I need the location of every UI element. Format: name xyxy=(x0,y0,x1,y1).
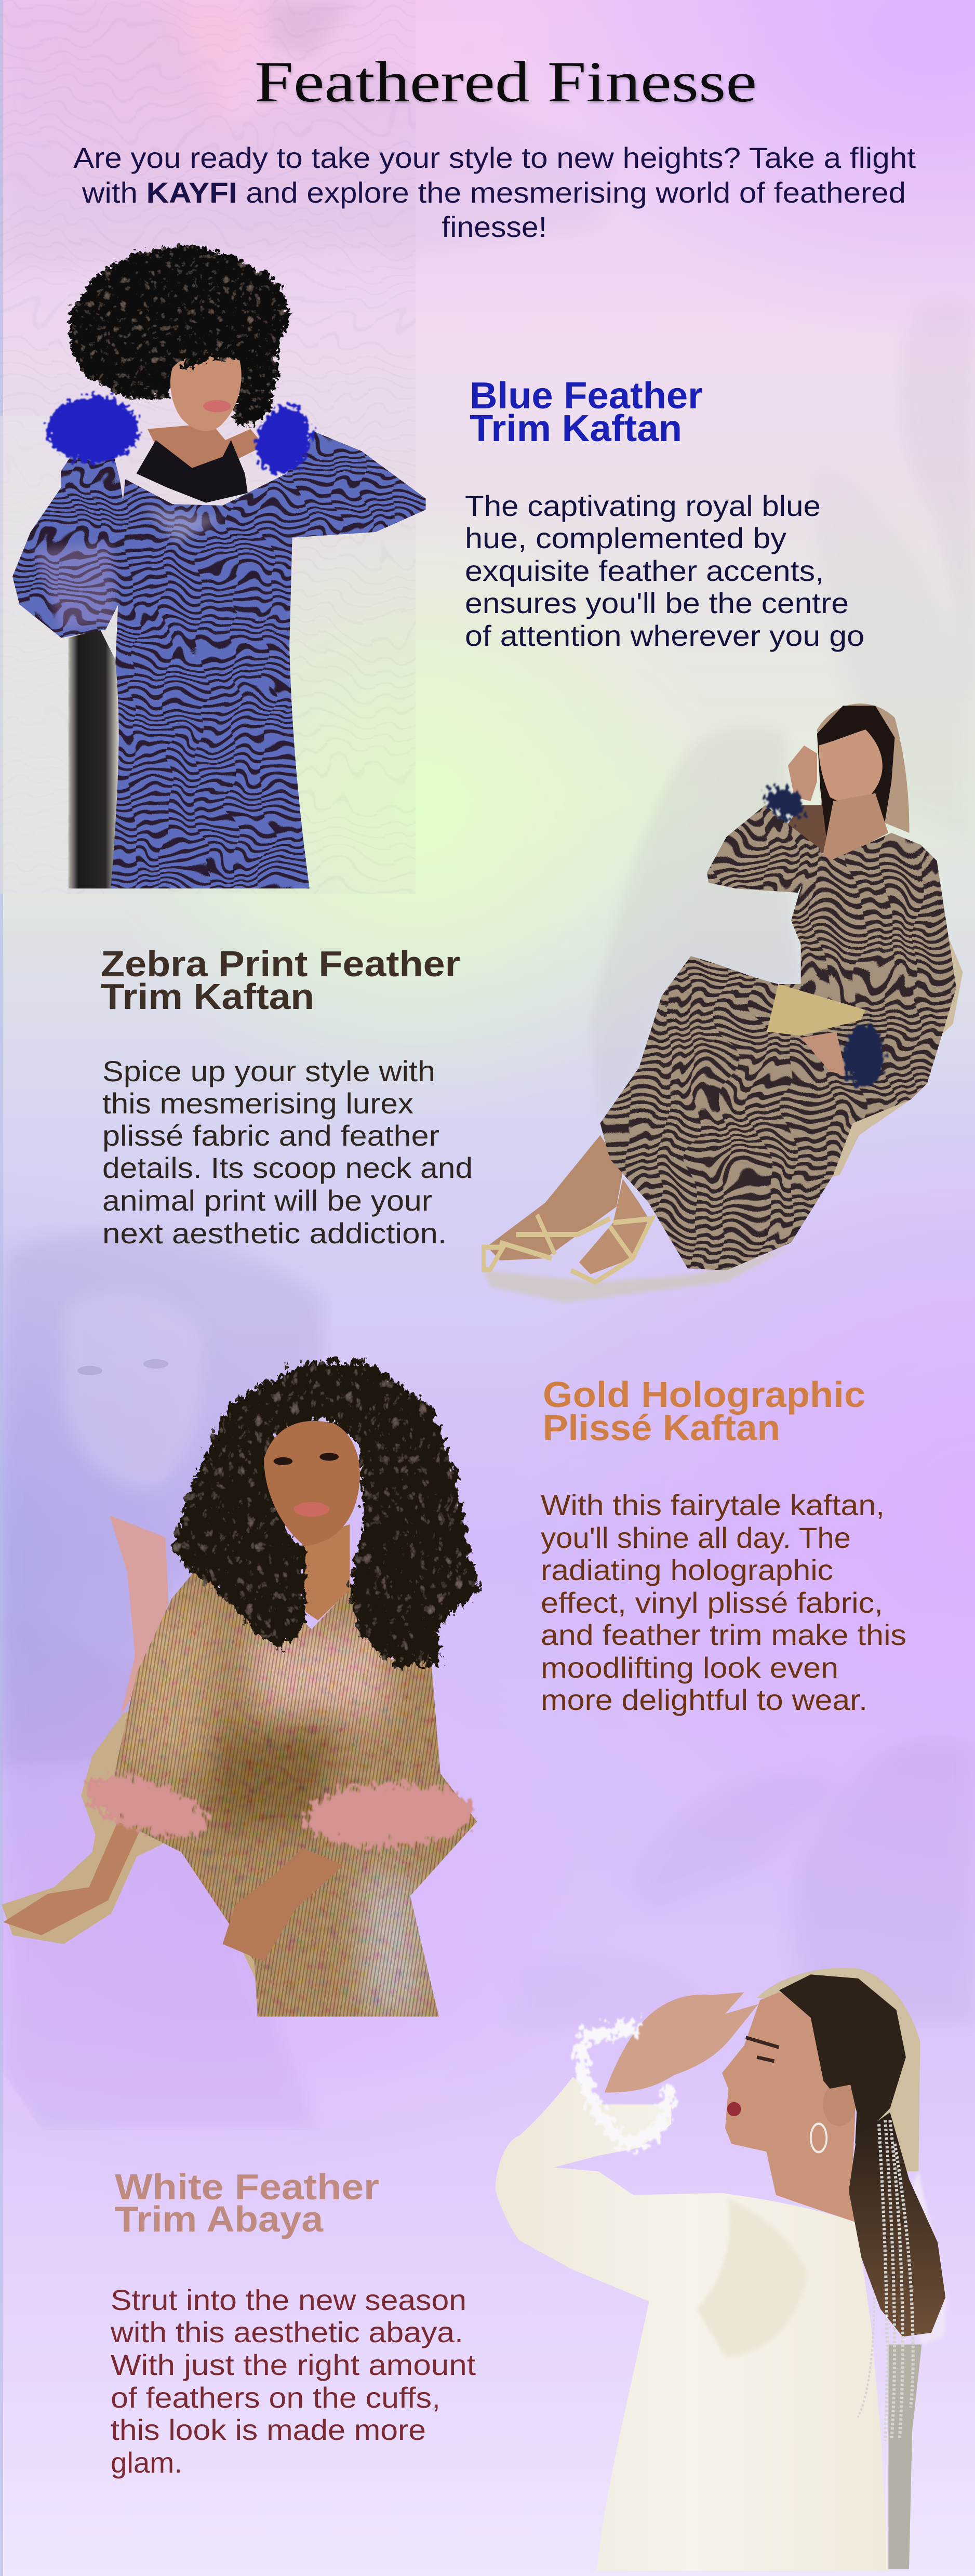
crystal chains xyxy=(858,2120,913,2441)
face xyxy=(819,729,883,804)
hair fringe curls xyxy=(178,339,245,368)
curly hair back xyxy=(67,241,288,423)
heading: gold holographic plisse kaftan: Plissé Kaftan xyxy=(543,1407,780,1448)
text block: white abaya: this look is made more xyxy=(111,2413,426,2446)
model 4: white feather trim abaya xyxy=(496,1968,947,2571)
white feather cuff xyxy=(581,2028,669,2144)
hoop earring xyxy=(811,2123,826,2152)
eye and brow xyxy=(746,2038,779,2061)
backdrop halo xyxy=(757,1968,920,2171)
lower hand xyxy=(801,1032,846,1075)
text block: blue kaftan: hue, complemented by xyxy=(465,522,786,554)
neck and hand skin xyxy=(148,423,264,476)
ponytail xyxy=(849,2113,945,2336)
tulle panel xyxy=(69,629,118,888)
right forearm and hand xyxy=(223,1848,343,1961)
heading: blue feather trim kaftan xyxy=(470,375,703,449)
left forearm xyxy=(3,1822,140,1935)
face xyxy=(264,1421,360,1546)
intro text: with KAYFI and explore the mesmerising world of feathered xyxy=(82,176,906,209)
face xyxy=(170,355,242,431)
text block: zebra kaftan: next aesthetic addiction. xyxy=(102,1217,447,1250)
text block: zebra kaftan: this mesmerising lurex xyxy=(102,1087,413,1120)
legs xyxy=(487,1135,623,1260)
heading: gold holographic plisse kaftan: Gold Holographic xyxy=(543,1374,865,1415)
heading: zebra print feather trim kaftan: Trim Kaftan xyxy=(101,976,314,1017)
text block: gold kaftan: moodlifting look even xyxy=(541,1651,838,1684)
heading: white feather trim abaya: Trim Abaya xyxy=(115,2199,324,2239)
heading: white feather trim abaya xyxy=(115,2167,379,2239)
blue feather cuff left xyxy=(47,395,139,462)
face and neck xyxy=(722,1992,857,2223)
patterned cushion xyxy=(110,1516,168,1715)
text block: gold kaftan: and feather trim make this xyxy=(541,1618,906,1651)
ghost image: faded profile lower right xyxy=(510,1739,975,2026)
text block: blue kaftan: of attention wherever you go xyxy=(465,619,864,652)
text block: white abaya: With just the right amount xyxy=(111,2348,476,2381)
ear xyxy=(823,2083,856,2126)
hand and wrist xyxy=(605,1992,758,2093)
blue feather cuff right xyxy=(249,400,318,481)
stone strip xyxy=(888,2345,921,2569)
ghost image: faded curly haired model left xyxy=(0,1233,322,2130)
lips xyxy=(203,400,231,413)
heading: zebra print feather trim kaftan: Zebra Print Feather xyxy=(101,944,460,984)
navy feather cuff lower xyxy=(844,1025,884,1086)
sofa arm xyxy=(2,1712,258,1983)
text block: white abaya: with this aesthetic abaya. xyxy=(110,2316,463,2348)
eyes and lips xyxy=(273,1453,339,1517)
model 2: zebra print feather trim kaftan xyxy=(484,703,975,1322)
text block: gold kaftan: you'll shine all day. The xyxy=(541,1521,851,1554)
title: Feathered Finesse xyxy=(255,50,757,114)
text block: zebra kaftan: animal print will be your xyxy=(102,1184,432,1217)
text block: blue kaftan xyxy=(465,489,864,652)
text block: gold kaftan: With this fairytale kaftan, xyxy=(541,1489,885,1521)
gold sandals xyxy=(484,1215,652,1282)
pale hair halo xyxy=(890,2171,947,2345)
floor patch xyxy=(484,1246,791,1302)
white dress xyxy=(496,2077,888,2571)
heading: gold holographic plisse kaftan xyxy=(543,1374,865,1448)
ghost image: faded seated model right xyxy=(591,301,975,1123)
zebra dress xyxy=(0,395,473,938)
text block: gold kaftan: effect, vinyl plissé fabric, xyxy=(541,1586,883,1619)
star scarf xyxy=(136,440,248,503)
text block: zebra kaftan: Spice up your style with xyxy=(102,1055,435,1087)
text block: gold kaftan xyxy=(541,1489,906,1716)
text block: white abaya: Strut into the new season xyxy=(111,2283,466,2316)
gold clutch xyxy=(767,984,865,1035)
text block: zebra kaftan: details. Its scoop neck and xyxy=(102,1151,473,1184)
text block: blue kaftan: The captivating royal blue xyxy=(465,489,821,522)
sleeve shading xyxy=(697,2199,808,2356)
hair xyxy=(817,706,894,853)
heading: blue feather trim kaftan: Blue Feather xyxy=(470,375,703,417)
model 3: gold holographic plisse kaftan xyxy=(2,1358,493,2023)
neck and chest xyxy=(302,1524,350,1621)
heading: zebra print feather trim kaftan xyxy=(101,944,460,1017)
pink feather cuff right xyxy=(304,1780,475,1851)
intro text: finesse! xyxy=(442,210,547,243)
raised hand xyxy=(788,746,817,801)
text block: zebra kaftan: plissé fabric and feather xyxy=(102,1119,439,1152)
model 1: blue feather trim kaftan xyxy=(0,241,473,938)
text block: gold kaftan: radiating holographic xyxy=(541,1553,833,1586)
curly hair xyxy=(168,1358,477,1664)
backdrop behind hair xyxy=(817,703,910,845)
navy feather cuff upper xyxy=(761,781,808,826)
text block: zebra kaftan xyxy=(102,1055,473,1250)
ghost image: faded model top left xyxy=(0,0,476,894)
pink feather cuff left xyxy=(82,1764,211,1849)
lips xyxy=(727,2102,741,2116)
text block: white abaya xyxy=(110,2283,476,2479)
backdrop remnant xyxy=(823,932,963,1179)
text block: blue kaftan: ensures you'll be the centre xyxy=(465,587,849,619)
text block: white abaya: glam. xyxy=(111,2446,182,2479)
heading: blue feather trim kaftan: Trim Kaftan xyxy=(470,408,682,449)
text block: blue kaftan: exquisite feather accents, xyxy=(465,554,824,587)
hair top xyxy=(779,1974,906,2144)
neck xyxy=(820,793,888,869)
intro text: Are you ready to take your style to new heights? Take a flight xyxy=(73,141,916,174)
intro text xyxy=(73,141,916,243)
text block: gold kaftan: more delightful to wear. xyxy=(541,1683,867,1716)
heading: white feather trim abaya: White Feather xyxy=(115,2167,379,2207)
brown wall xyxy=(765,805,833,857)
zebra dress xyxy=(565,765,975,1322)
hologram dress xyxy=(96,1559,493,2023)
text block: white abaya: of feathers on the cuffs, xyxy=(111,2381,440,2414)
